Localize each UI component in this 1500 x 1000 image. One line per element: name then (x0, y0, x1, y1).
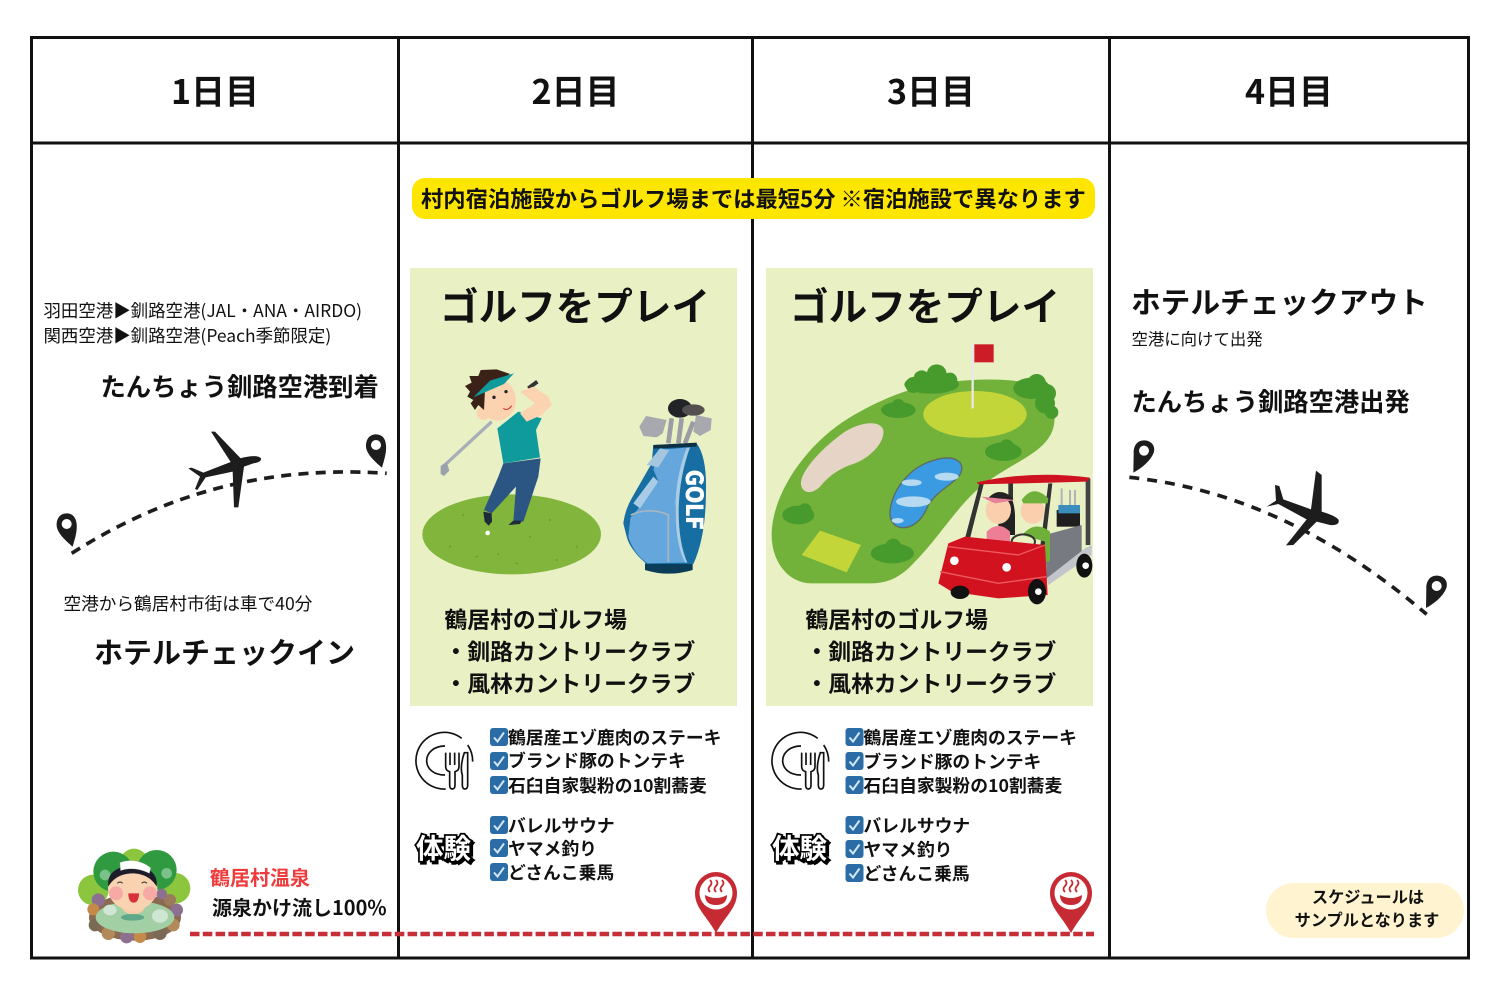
onsen note: 源泉かけ流し100% (212, 892, 387, 921)
course list: 鶴居村のゴルフ場 (444, 602, 627, 635)
icon: onsen bather (78, 849, 190, 943)
course list: ・釧路カントリークラブ (444, 634, 695, 667)
experience label: 体験 (416, 826, 471, 866)
drive time text: 空港から鶴居村市街は車で40分 (64, 591, 313, 616)
flight routes text: 関西空港▶釧路空港(Peach季節限定) (44, 323, 331, 348)
panel: day 2 golf (416, 276, 721, 885)
food checklist: 鶴居産エゾ鹿肉のステーキ (864, 724, 1077, 750)
heading: play golf: ゴルフをプレイ (440, 276, 710, 332)
experience checklist (846, 812, 970, 886)
panel: day 3 golf (772, 276, 1092, 886)
food checklist: 鶴居産エゾ鹿肉のステーキ (508, 724, 721, 750)
experience checklist: ヤマメ釣り (864, 836, 952, 862)
experience checklist: ヤマメ釣り (508, 835, 597, 861)
header: day 3: 3日目 (887, 65, 975, 114)
callout: travel time banner: 村内宿泊施設からゴルフ場までは最短5分 ※宿泊施設で異なります (421, 182, 1086, 214)
illustration: golf bag: GOLF (679, 470, 711, 530)
panel: green background day 2 (410, 268, 737, 706)
day headers (171, 65, 1333, 114)
experience checklist (490, 812, 615, 885)
course list (444, 602, 695, 699)
course list: ・風林カントリークラブ (806, 666, 1056, 699)
food checklist (490, 724, 721, 798)
illustration: golf bag (623, 399, 712, 574)
experience checklist: どさんこ乗馬 (508, 859, 614, 885)
experience checklist: どさんこ乗馬 (864, 860, 970, 886)
food checklist: 石臼自家製粉の10割蕎麦 (864, 772, 1063, 798)
icon: onsen map pin day 3 (1050, 872, 1092, 933)
flight routes text: 羽田空港▶釧路空港(JAL・ANA・AIRDO) (44, 298, 362, 323)
icon: plate and cutlery (772, 732, 829, 789)
header: day 1: 1日目 (171, 65, 259, 114)
food checklist (846, 724, 1077, 798)
icon: onsen map pin day 2 (695, 872, 737, 933)
course list (806, 602, 1056, 699)
illustration: golfer (422, 369, 601, 574)
flight path illustration (1129, 440, 1447, 614)
panel: day 4 departure (1129, 279, 1464, 938)
heading: play golf: ゴルフをプレイ (790, 276, 1060, 332)
panel: green background day 3 (766, 268, 1093, 706)
course list: ・風林カントリークラブ (444, 666, 695, 699)
course list: ・釧路カントリークラブ (806, 634, 1056, 667)
experience checklist: バレルサウナ (864, 812, 970, 838)
to airport text: 空港に向けて出発 (1132, 326, 1263, 350)
check-out heading: ホテルチェックアウト (1131, 279, 1428, 322)
illustration: golf cart (938, 475, 1092, 604)
onsen name: 鶴居村温泉 (210, 862, 310, 891)
note: sample schedule (1266, 883, 1464, 938)
food checklist: 石臼自家製粉の10割蕎麦 (508, 772, 707, 798)
header: day 4: 4日目 (1245, 65, 1333, 114)
panel: day 1 arrival (44, 298, 387, 943)
experience checklist: バレルサウナ (508, 812, 615, 838)
flight path illustration (57, 432, 387, 553)
note: sample schedule: スケジュールは (1312, 884, 1424, 908)
illustration: golf course (772, 344, 1058, 583)
note: sample schedule: サンプルとなります (1295, 907, 1439, 931)
check-in heading: ホテルチェックイン (94, 630, 355, 672)
icon: plate and cutlery (416, 732, 473, 789)
course list: 鶴居村のゴルフ場 (806, 602, 988, 635)
arrival heading: たんちょう釧路空港到着 (100, 368, 379, 404)
experience label: 体験 (772, 826, 827, 866)
header: day 2: 2日目 (531, 65, 620, 114)
food checklist: ブランド豚のトンテキ (864, 748, 1041, 774)
onsen route dashed line (190, 932, 1094, 936)
departure heading: たんちょう釧路空港出発 (1132, 383, 1410, 419)
food checklist: ブランド豚のトンテキ (508, 747, 686, 773)
flight routes text (44, 298, 362, 348)
